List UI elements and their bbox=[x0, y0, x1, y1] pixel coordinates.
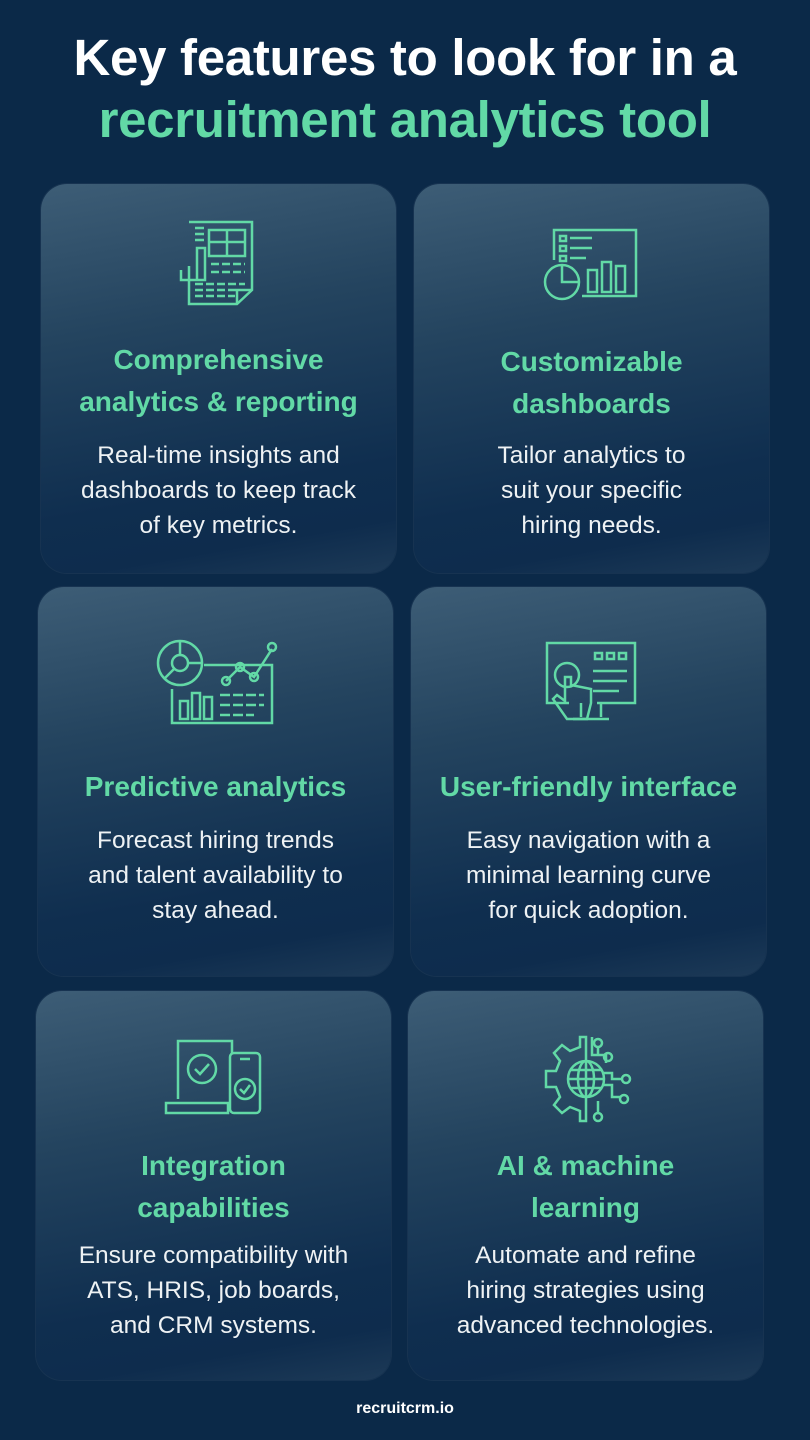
body text: Tailor analytics to bbox=[498, 442, 685, 469]
body text: Ensure compatibility with bbox=[79, 1242, 348, 1269]
heading: capabilities bbox=[137, 1192, 290, 1223]
body text: Forecast hiring trends bbox=[97, 827, 334, 854]
title: Key features to look for in a bbox=[74, 29, 736, 86]
body text bbox=[466, 827, 711, 924]
panel: predictive analytics bbox=[38, 587, 393, 976]
panel: comprehensive analytics bbox=[41, 184, 396, 573]
body text: dashboards to keep track bbox=[81, 477, 356, 504]
heading: Integration bbox=[141, 1150, 286, 1181]
body text: hiring needs. bbox=[521, 512, 662, 539]
body text: stay ahead. bbox=[152, 897, 279, 924]
panel: user-friendly interface bbox=[411, 587, 766, 976]
body text: of key metrics. bbox=[140, 512, 297, 539]
body text: hiring strategies using bbox=[466, 1277, 705, 1304]
body text: advanced technologies. bbox=[457, 1312, 714, 1339]
footer: recruitcrm.io bbox=[356, 1400, 454, 1417]
panel: customizable dashboards bbox=[414, 184, 769, 573]
panel: AI & machine learning bbox=[408, 991, 763, 1380]
body text bbox=[81, 442, 356, 539]
body text: Automate and refine bbox=[475, 1242, 696, 1269]
heading: Predictive analytics bbox=[85, 771, 346, 802]
body text bbox=[457, 1242, 714, 1339]
icon: report document bbox=[180, 220, 254, 306]
body text: suit your specific bbox=[501, 477, 682, 504]
heading bbox=[500, 346, 683, 419]
body text: minimal learning curve bbox=[466, 862, 711, 889]
body text: ATS, HRIS, job boards, bbox=[87, 1277, 340, 1304]
body text: for quick adoption. bbox=[488, 897, 689, 924]
heading: AI & machine bbox=[497, 1150, 674, 1181]
body text: and CRM systems. bbox=[110, 1312, 317, 1339]
heading: User-friendly interface bbox=[440, 771, 737, 802]
heading: Comprehensive bbox=[113, 344, 324, 375]
title: recruitment analytics tool bbox=[99, 91, 711, 148]
body text bbox=[88, 827, 343, 924]
icon: devices bbox=[164, 1040, 262, 1114]
heading bbox=[79, 344, 358, 417]
heading bbox=[137, 1150, 290, 1223]
icon: gear globe circuit bbox=[544, 1036, 632, 1122]
body text: Real-time insights and bbox=[97, 442, 340, 469]
heading bbox=[497, 1150, 674, 1223]
icon: chart trends bbox=[156, 640, 278, 724]
heading: dashboards bbox=[512, 388, 671, 419]
body text bbox=[79, 1242, 348, 1339]
body text: and talent availability to bbox=[88, 862, 343, 889]
heading: Customizable bbox=[500, 346, 683, 377]
body text bbox=[498, 442, 685, 539]
panel: integration capabilities bbox=[36, 991, 391, 1380]
icon: dashboard bbox=[544, 228, 638, 300]
title bbox=[74, 29, 738, 148]
icon: monitor with hand bbox=[546, 642, 636, 720]
heading: analytics & reporting bbox=[79, 386, 358, 417]
heading: learning bbox=[531, 1192, 640, 1223]
body text: Easy navigation with a bbox=[467, 827, 710, 854]
